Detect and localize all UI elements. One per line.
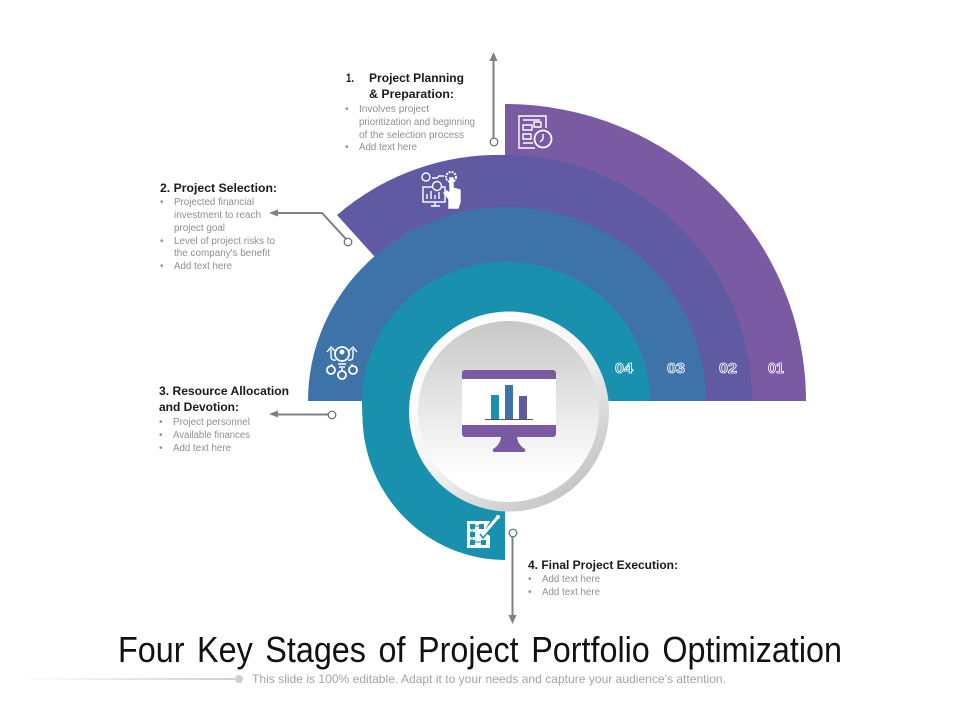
heading: stage 3: and Devotion: bbox=[159, 400, 239, 414]
body: stage 3: • bbox=[159, 417, 163, 428]
stage numbers bbox=[615, 360, 784, 377]
icon: flow chart with pencil bbox=[467, 515, 500, 548]
number 03: 03 bbox=[667, 360, 685, 377]
arrow: stage 4 bbox=[508, 529, 517, 624]
body: stage 2: Level of project risks to bbox=[174, 236, 275, 247]
body: stage 2: Projected financial bbox=[174, 197, 254, 208]
heading: stage 1: Project Planning bbox=[369, 71, 464, 85]
ring 01: project planning bbox=[505, 104, 806, 401]
icon: lightbulb with people bbox=[327, 347, 357, 379]
body: stage 2: investment to reach bbox=[174, 210, 261, 221]
body: stage 1: prioritization and beginning bbox=[359, 117, 475, 128]
body: stage 3: • bbox=[159, 443, 163, 454]
ring 03: resource allocation bbox=[308, 207, 706, 401]
heading: stage 2: 2. Project Selection: bbox=[160, 181, 277, 195]
body: stage 2: Add text here bbox=[174, 261, 232, 272]
arrow: stage 1 bbox=[490, 52, 498, 146]
body: stage 1: of the selection process bbox=[359, 130, 464, 141]
body: stage 2: • bbox=[160, 236, 164, 247]
body: stage 4: • bbox=[528, 587, 532, 598]
heading: stage 1: 1. bbox=[346, 71, 354, 85]
body: stage 1: • bbox=[345, 104, 349, 115]
footer line with dot bbox=[15, 675, 243, 683]
body: stage 1: Involves project bbox=[359, 104, 429, 115]
body: stage 2: project goal bbox=[174, 223, 225, 234]
body: stage 4: Add text here bbox=[542, 587, 600, 598]
body: stage 1: Add text here bbox=[359, 142, 417, 153]
body: stage 1: • bbox=[345, 142, 349, 153]
body: stage 2: • bbox=[160, 261, 164, 272]
ring 02: project selection bbox=[337, 155, 752, 401]
heading: stage 1 bbox=[346, 71, 464, 101]
title: Four Key Stages of Project Portfolio Optimization bbox=[118, 629, 842, 670]
body: stage 4: Add text here bbox=[542, 574, 600, 585]
heading: stage 3: 3. Resource Allocation bbox=[159, 384, 289, 398]
body: stage 3: Project personnel bbox=[173, 417, 250, 428]
text block: stage 4 bbox=[528, 558, 678, 598]
heading: stage 1: & Preparation: bbox=[369, 87, 454, 101]
text block: stage 2 bbox=[160, 181, 277, 272]
heading: stage 3 bbox=[159, 384, 289, 414]
arrow: stage 3 bbox=[269, 410, 336, 419]
text block: stage 1 bbox=[345, 71, 475, 153]
number 01: 01 bbox=[768, 360, 784, 377]
number 02: 02 bbox=[719, 360, 737, 377]
body: stage 2: • bbox=[160, 197, 164, 208]
icon: hand touching dashboard bbox=[422, 172, 460, 208]
arrow: stage 2 bbox=[269, 210, 352, 246]
body: stage 3: Available finances bbox=[173, 430, 250, 441]
icon: gantt document with clock bbox=[519, 116, 552, 148]
body: stage 3: • bbox=[159, 430, 163, 441]
ring 04: final execution bbox=[362, 262, 650, 560]
subtitle: This slide is 100% editable. Adapt it to your needs and capture your audience's attention. bbox=[252, 672, 726, 686]
text block: stage 3 bbox=[159, 384, 289, 454]
icon: monitor with bar chart bbox=[462, 370, 556, 452]
body: stage 4: • bbox=[528, 574, 532, 585]
body: stage 3 bbox=[159, 417, 250, 454]
body: stage 3: Add text here bbox=[173, 443, 231, 454]
body: stage 2 bbox=[160, 197, 275, 272]
body: stage 1 bbox=[345, 104, 475, 153]
body: stage 4 bbox=[528, 574, 600, 598]
number 04: 04 bbox=[615, 360, 634, 377]
body: stage 2: the company's benefit bbox=[174, 248, 270, 259]
heading: stage 4: 4. Final Project Execution: bbox=[528, 558, 678, 572]
center disc bbox=[409, 312, 609, 512]
